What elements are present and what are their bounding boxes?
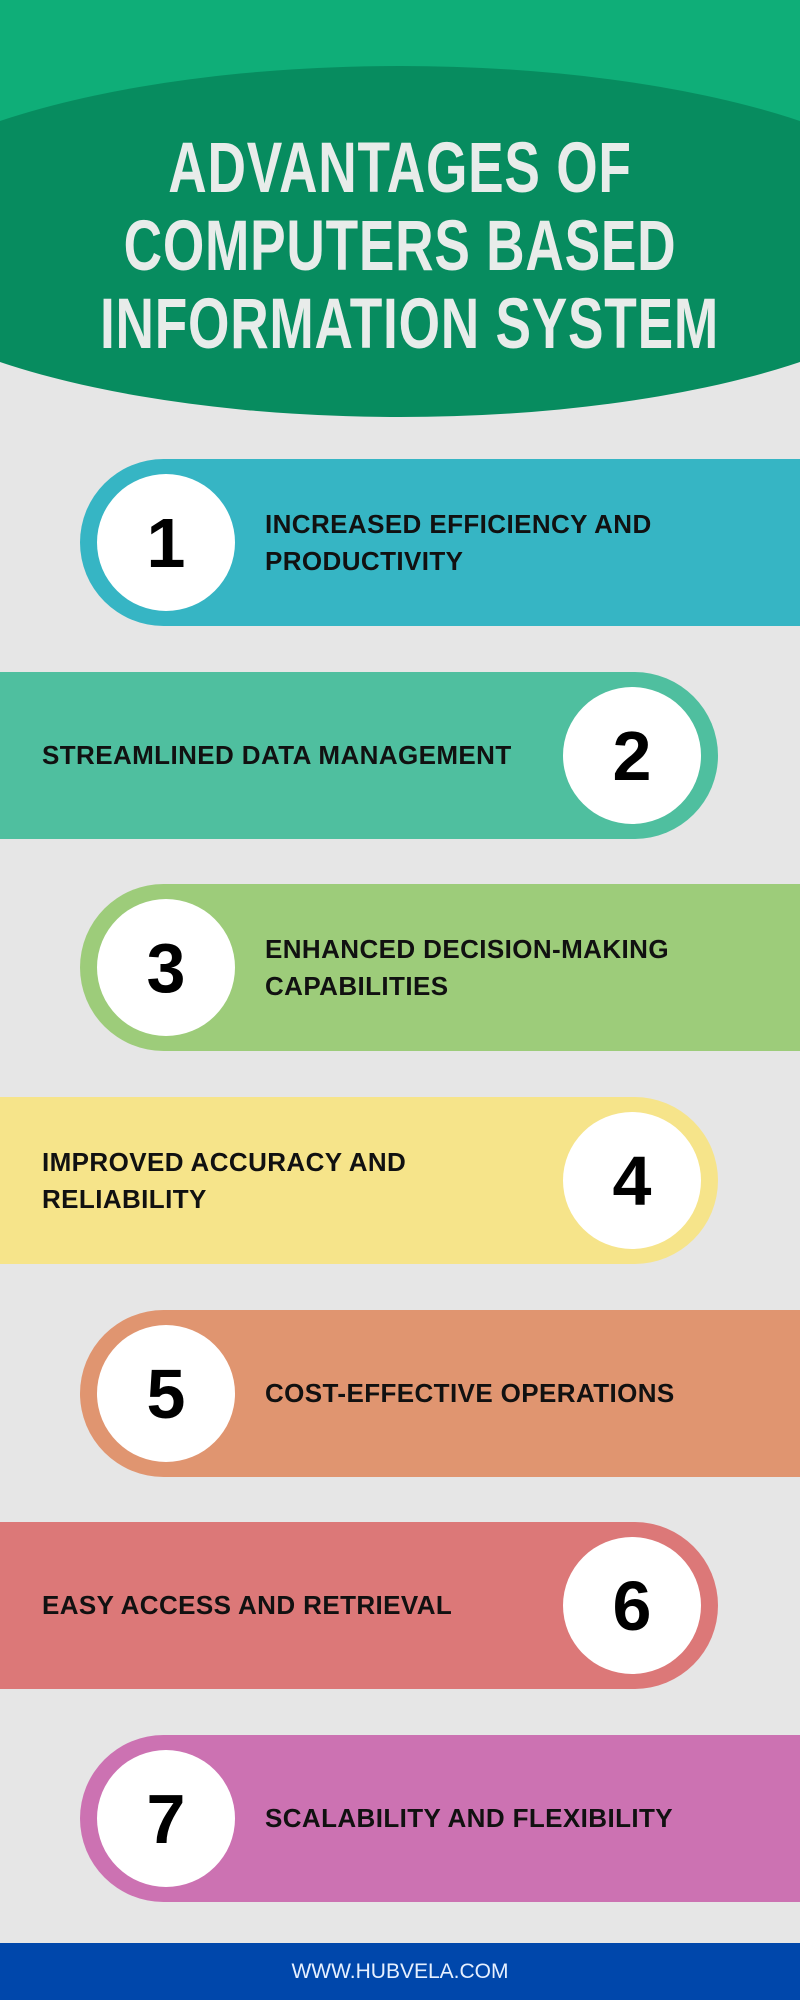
number 3: [97, 899, 235, 1036]
footer: [0, 1943, 800, 2000]
title: ADVANTAGES OF: [168, 129, 632, 208]
number 6: [563, 1537, 701, 1674]
text 4: IMPROVED ACCURACY AND: [42, 1146, 406, 1176]
number 2: 2: [613, 716, 651, 794]
number 5: [97, 1325, 235, 1462]
number 7: [97, 1750, 235, 1887]
text 1: INCREASED EFFICIENCY AND: [265, 508, 652, 538]
title: INFORMATION SYSTEM: [100, 285, 719, 364]
item 6: [0, 1522, 718, 1689]
item 3: [80, 884, 800, 1051]
number 2: [563, 687, 701, 824]
number 5: 5: [147, 1354, 185, 1432]
header ellipse: [0, 66, 800, 417]
item 2: [0, 672, 718, 839]
item 5: [80, 1310, 800, 1477]
number 4: 4: [613, 1142, 651, 1220]
item 4: [0, 1097, 718, 1264]
number 1: [97, 474, 235, 611]
number 3: 3: [147, 928, 185, 1006]
text 3: [265, 934, 669, 1000]
number 7: 7: [147, 1780, 185, 1858]
item 1: [80, 459, 800, 626]
text 4: [42, 1146, 406, 1214]
item 7: [80, 1735, 800, 1902]
text 7: SCALABILITY AND FLEXIBILITY: [265, 1803, 673, 1833]
number 1: 1: [147, 504, 185, 582]
header background: [0, 0, 800, 241]
text 1: [265, 508, 652, 576]
text 1: PRODUCTIVITY: [265, 546, 463, 576]
text 2: STREAMLINED DATA MANAGEMENT: [42, 740, 512, 770]
text 4: RELIABILITY: [42, 1184, 207, 1214]
footer: WWW.HUBVELA.COM: [291, 1960, 508, 1982]
number 4: [563, 1112, 701, 1249]
text 3: ENHANCED DECISION-MAKING: [265, 934, 669, 964]
title: COMPUTERS BASED: [124, 207, 676, 286]
number 6: 6: [613, 1566, 651, 1644]
text 3: CAPABILITIES: [265, 970, 448, 1000]
text 5: COST-EFFECTIVE OPERATIONS: [265, 1378, 675, 1408]
text 6: EASY ACCESS AND RETRIEVAL: [42, 1590, 452, 1620]
title: [100, 129, 719, 364]
